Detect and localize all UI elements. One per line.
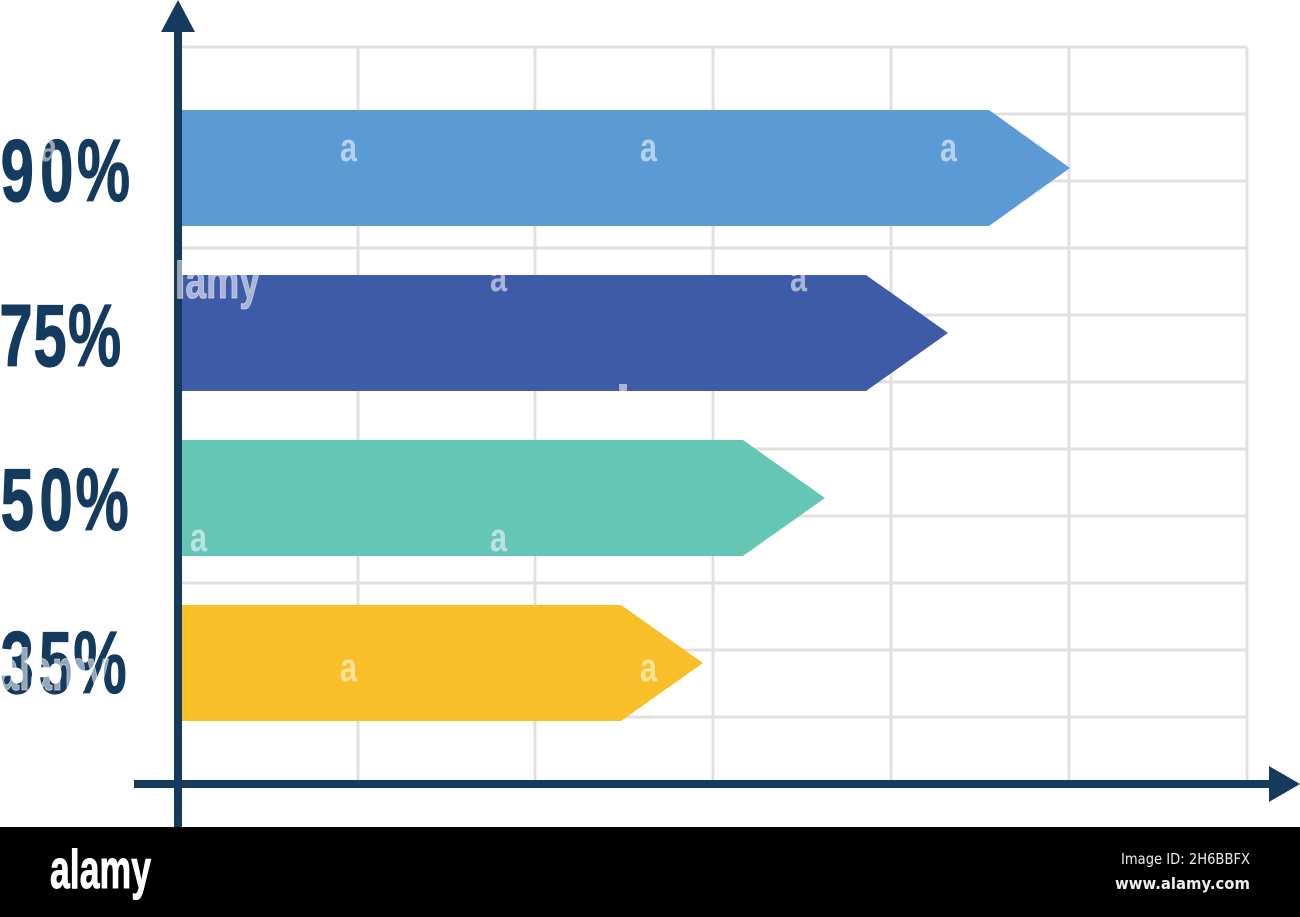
horizontal axis arrow	[134, 766, 1300, 802]
arrow bar: 35%	[182, 605, 703, 721]
watermark marks: a	[40, 126, 58, 170]
arrow bar: 75%	[182, 275, 948, 391]
watermark marks: a	[640, 126, 658, 170]
watermark marks: a	[940, 126, 958, 170]
website: www.alamy.com	[1115, 874, 1250, 893]
watermark marks: a	[190, 516, 208, 560]
arrow bar: 50%	[182, 440, 825, 556]
watermark marks: a	[640, 646, 658, 690]
watermark marks: a	[790, 256, 808, 300]
arrow bar: 90%	[182, 110, 1070, 226]
footer bar	[0, 827, 1300, 917]
vertical axis arrow	[161, 0, 195, 827]
footer logo: alamy	[50, 838, 151, 900]
label: 35%: 35%	[1, 613, 127, 712]
watermark marks: a	[340, 646, 358, 690]
watermark marks: alamy	[0, 638, 109, 703]
watermark marks: a	[340, 126, 358, 170]
watermark marks	[0, 126, 958, 703]
image id: Image ID: 2H6BBFX	[1121, 850, 1250, 868]
watermark marks: a	[490, 516, 508, 560]
label: 90%: 90%	[1, 121, 130, 220]
watermark marks: lamy	[175, 252, 260, 310]
watermark marks: a	[490, 256, 508, 300]
label: 50%: 50%	[1, 450, 129, 549]
label: 75%: 75%	[0, 286, 121, 385]
